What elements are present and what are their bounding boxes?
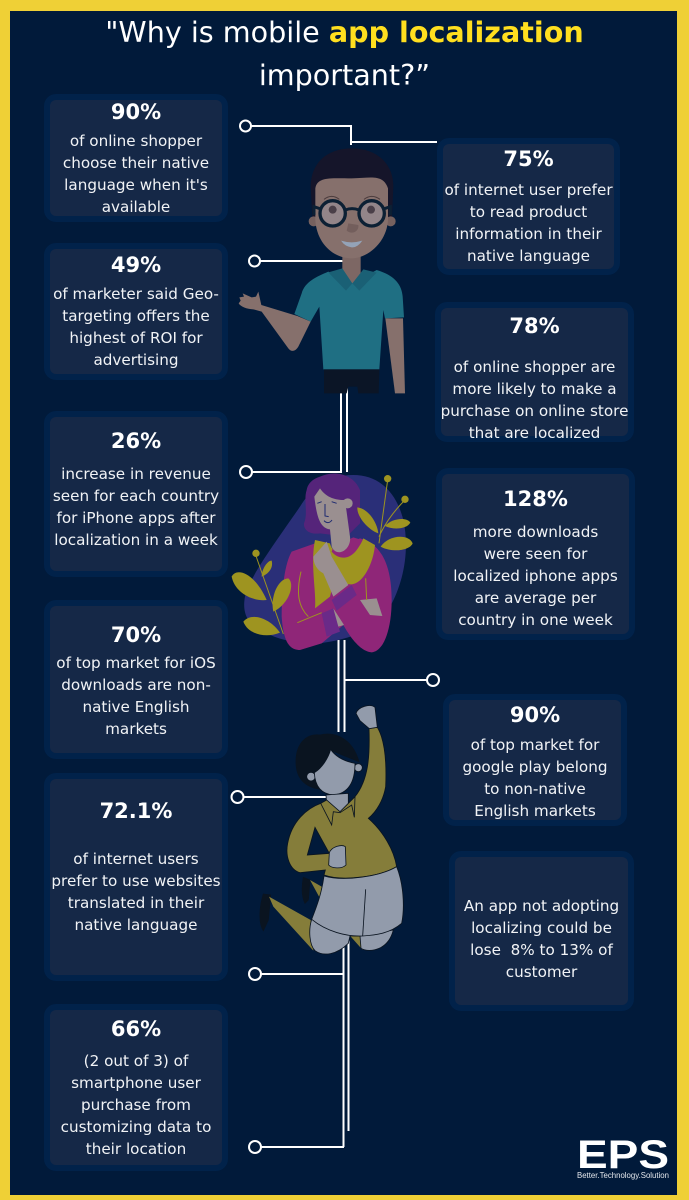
panel: 128% downloads xyxy=(436,468,635,640)
stat: 66% xyxy=(111,1017,161,1041)
stat: 26% xyxy=(111,429,161,453)
stat: 78% xyxy=(509,314,560,338)
text: country in one week xyxy=(458,611,613,629)
stat: 90% xyxy=(111,100,161,124)
text: markets xyxy=(105,720,167,738)
text: prefer to use websites xyxy=(51,872,221,890)
text: of internet user prefer xyxy=(444,181,613,199)
text: highest of ROI for xyxy=(69,329,203,347)
panel: losing customers xyxy=(449,851,634,1011)
text xyxy=(53,285,219,369)
text: for iPhone apps after xyxy=(56,509,216,527)
text xyxy=(444,181,613,265)
title: important?” xyxy=(259,58,430,92)
text: that are localized xyxy=(469,424,600,442)
text: more likely to make a xyxy=(452,380,617,398)
text: downloads are non- xyxy=(61,676,211,694)
text: localizing could be xyxy=(471,919,612,937)
stat: 70% xyxy=(111,623,161,647)
text: English markets xyxy=(474,802,596,820)
text: native English xyxy=(82,698,190,716)
logo: EPS: Better.Technology.Solution xyxy=(577,1170,669,1180)
connector: 90% and 75% xyxy=(240,120,437,145)
text: to read product xyxy=(470,203,587,221)
panel: 78% online shoppers xyxy=(435,302,634,442)
stat: 128% xyxy=(503,487,568,511)
text: localization in a week xyxy=(54,531,218,549)
panel: 90% online shoppers xyxy=(44,94,228,222)
text: translated in their xyxy=(68,894,204,912)
text: are average per xyxy=(475,589,596,607)
text: purchase from xyxy=(81,1096,191,1114)
connector: 72.1% xyxy=(232,791,326,803)
illustration: man with glasses xyxy=(239,148,405,393)
text: of marketer said Geo- xyxy=(53,285,219,303)
stat: 90% xyxy=(510,703,560,727)
text xyxy=(51,850,221,934)
title: "Why is mobile app localization xyxy=(105,15,584,49)
text: available xyxy=(102,198,170,216)
text: (2 out of 3) of xyxy=(84,1052,188,1070)
panel: 49% marketers xyxy=(44,243,228,380)
panel: 66% smartphone users xyxy=(44,1004,228,1171)
text xyxy=(453,523,618,629)
text: their location xyxy=(86,1140,186,1158)
stat: 72.1% xyxy=(100,799,172,823)
text: native language xyxy=(74,916,197,934)
text: of top market for xyxy=(471,736,599,754)
panel: 72.1% websites xyxy=(44,773,228,981)
panel: 70% iOS markets xyxy=(44,600,228,759)
text: of top market for iOS xyxy=(56,654,216,672)
text: localized iphone apps xyxy=(453,567,618,585)
text: customizing data to xyxy=(61,1118,211,1136)
text: advertising xyxy=(93,351,179,369)
text: information in their xyxy=(455,225,602,243)
text: customer xyxy=(506,963,577,981)
text: increase in revenue xyxy=(61,465,211,483)
text: more downloads xyxy=(473,523,598,541)
text: of online shopper xyxy=(70,132,202,150)
text: choose their native xyxy=(63,154,209,172)
stat: 49% xyxy=(111,253,161,277)
text: google play belong xyxy=(462,758,608,776)
text xyxy=(53,465,219,549)
text: seen for each country xyxy=(53,487,219,505)
text xyxy=(464,897,619,981)
text: An app not adopting xyxy=(464,897,619,915)
connector: 66% and lower xyxy=(249,940,348,1153)
connector: 26% xyxy=(240,375,347,478)
connector: 90% google play xyxy=(338,640,439,732)
text xyxy=(63,132,209,216)
illustration: jumping person xyxy=(260,706,403,954)
logo: EPS: EPS xyxy=(577,1133,669,1177)
stat: 75% xyxy=(503,147,554,171)
text: to non-native xyxy=(484,780,586,798)
panel: 26% revenue xyxy=(44,411,228,577)
text: smartphone user xyxy=(71,1074,201,1092)
text: of online shopper are xyxy=(454,358,615,376)
text: purchase on online store xyxy=(441,402,628,420)
illustration: woman with plants xyxy=(232,473,413,652)
text xyxy=(56,654,216,738)
title xyxy=(105,15,584,92)
text: lose 8% to 13% of xyxy=(470,941,613,959)
text: of internet users xyxy=(73,850,199,868)
text xyxy=(462,736,608,820)
text xyxy=(61,1052,211,1158)
connector: 49% xyxy=(249,256,343,266)
text: language when it's xyxy=(64,176,208,194)
panel: 90% google play xyxy=(443,694,627,826)
text xyxy=(441,358,628,442)
text: targeting offers the xyxy=(62,307,210,325)
text: were seen for xyxy=(484,545,587,563)
panel: 75% internet users xyxy=(437,138,620,275)
text: native language xyxy=(467,247,590,265)
